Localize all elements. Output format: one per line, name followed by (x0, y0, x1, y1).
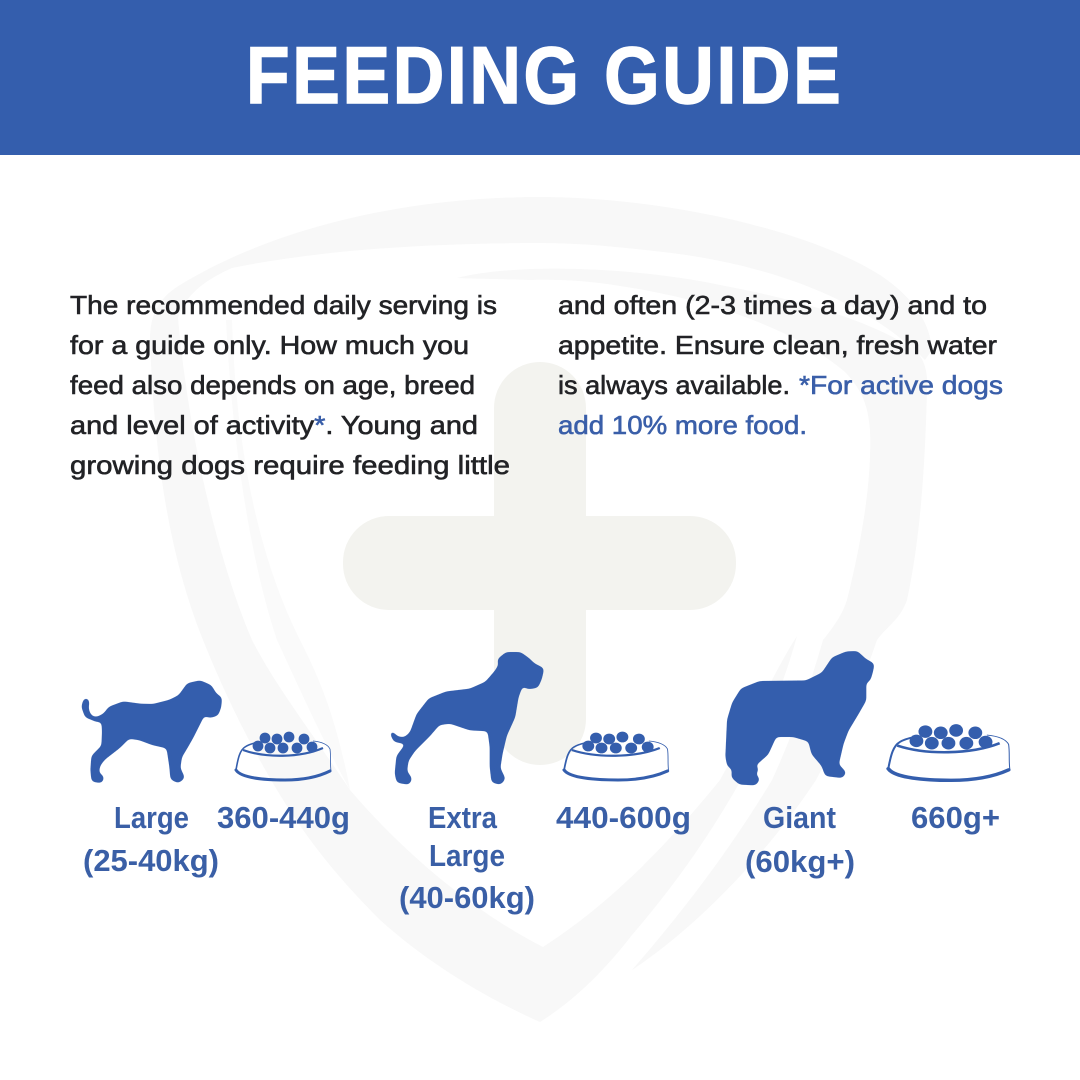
label: extra large portion: 440-600g (556, 800, 691, 835)
header banner (0, 0, 1080, 155)
icon: extra large dog silhouette (392, 654, 542, 783)
label: large portion: 360-440g (217, 800, 350, 835)
icon: large dog food bowl (236, 732, 331, 780)
label: extra large size (399, 800, 535, 915)
label: extra large size: Extra (428, 800, 498, 835)
watermark: shield and cross (150, 197, 932, 1022)
label: large size: Large (114, 800, 189, 835)
title: FEEDING GUIDE (246, 31, 843, 121)
text block: left column: and level of activity *. Young and (70, 410, 478, 440)
icon: large dog silhouette (83, 682, 220, 781)
text block: left column: growing dogs require feeding little (70, 450, 510, 480)
label: extra large size: Large (429, 838, 505, 873)
label: giant size: Giant (763, 800, 836, 835)
text block: left column: feed also depends on age, breed (70, 370, 475, 400)
label: large size: (25-40kg) (83, 843, 219, 878)
text block: left column: for a guide only. How much you (70, 330, 469, 360)
label: giant portion: 660g+ (911, 800, 1000, 835)
text block: right column: *For active dogs (799, 370, 1003, 400)
text block: right column: is always available. (558, 370, 790, 400)
text block: right column: add 10% more food. (558, 410, 807, 440)
text block: left column: The recommended daily serving is (70, 290, 497, 320)
label: extra large size: (40-60kg) (399, 880, 535, 915)
text block: left column (70, 290, 510, 480)
label: giant size (745, 800, 855, 879)
icon: giant dog silhouette (727, 653, 872, 783)
text block: right column (558, 290, 1003, 440)
icon: extra large dog food bowl (564, 732, 669, 780)
text block: right column: appetite. Ensure clean, fresh water (558, 330, 997, 360)
text block: right column: and often (2-3 times a day) and to (558, 290, 987, 320)
label: large size (83, 800, 219, 878)
icon: giant dog food bowl (888, 724, 1010, 780)
label: giant size: (60kg+) (745, 844, 855, 879)
